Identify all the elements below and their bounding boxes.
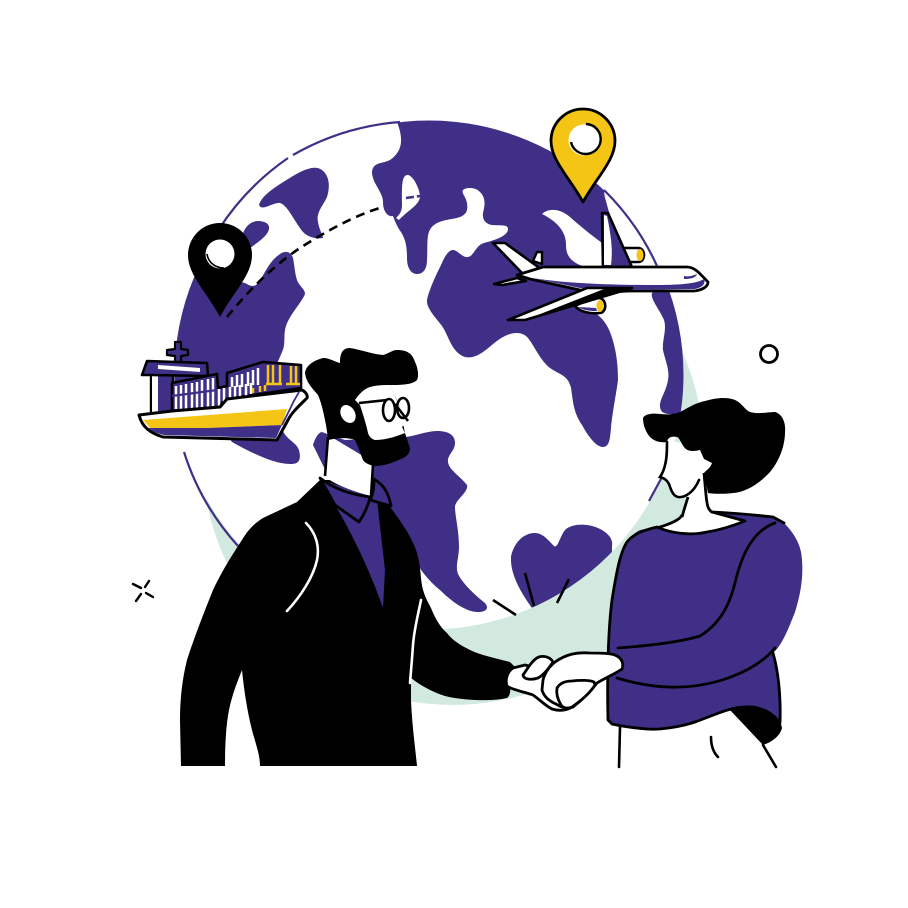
continent: greenland	[259, 168, 329, 238]
handshake	[506, 653, 623, 710]
man: ear	[337, 402, 359, 426]
continent: south america	[313, 431, 487, 612]
mast	[167, 342, 188, 363]
woman: back of skirt	[730, 707, 782, 745]
bridge	[142, 361, 208, 414]
man: collar	[320, 478, 391, 522]
man: suit	[180, 480, 515, 766]
icon: black location pin	[188, 223, 252, 317]
woman: neckline	[657, 473, 745, 534]
background circle: mint	[202, 203, 704, 705]
container ship	[139, 342, 307, 440]
handshake impact rays	[493, 573, 569, 615]
man's hand	[506, 665, 572, 710]
decorative small ring	[760, 346, 778, 362]
globe	[174, 120, 684, 629]
woman: legs	[619, 727, 776, 767]
continent: north america	[174, 252, 305, 464]
man: face	[355, 385, 408, 440]
man: neck	[324, 435, 373, 496]
continent: small island	[243, 221, 270, 248]
white wedge under globe edge	[604, 194, 646, 270]
white container stripes	[176, 368, 258, 409]
thumb over hand	[557, 680, 595, 708]
woman: sweater outlines	[608, 512, 784, 729]
globe outline arcs	[184, 122, 662, 546]
woman's hand	[542, 653, 623, 708]
continent: east edge	[652, 292, 684, 414]
icon: yellow location pin	[551, 109, 615, 202]
rear stabilizer upper	[493, 243, 545, 273]
man with beard and suit	[180, 348, 515, 766]
rear stabilizer lower	[494, 278, 526, 285]
woman: sweater	[607, 512, 802, 729]
containers	[172, 362, 301, 411]
man: shirt	[322, 480, 385, 608]
man: jacket highlights	[287, 523, 421, 683]
decorative sparkle	[133, 581, 153, 601]
lower engine	[575, 298, 605, 313]
man: glasses	[359, 398, 409, 421]
woman: face outline	[660, 442, 699, 497]
continents	[174, 120, 684, 612]
airplane	[493, 213, 708, 320]
woman: face fill	[657, 440, 745, 534]
man: hair and beard	[305, 348, 418, 466]
illustration: global trade handshake	[132, 108, 802, 768]
rear stabilizer upright	[533, 252, 542, 264]
tail fin	[602, 213, 632, 267]
white bay near plane	[542, 210, 602, 267]
hull	[139, 390, 307, 440]
main wing	[508, 288, 632, 320]
woman: hair	[643, 398, 785, 494]
white lake	[396, 175, 420, 220]
upper engine	[624, 248, 644, 262]
dashed flight route	[227, 196, 420, 317]
woman	[607, 398, 802, 767]
yellow container stripes	[253, 365, 300, 393]
man's thumb	[523, 656, 553, 679]
continent: australia	[510, 524, 612, 608]
fuselage	[517, 267, 708, 292]
continent: eurasia and africa	[372, 120, 618, 447]
